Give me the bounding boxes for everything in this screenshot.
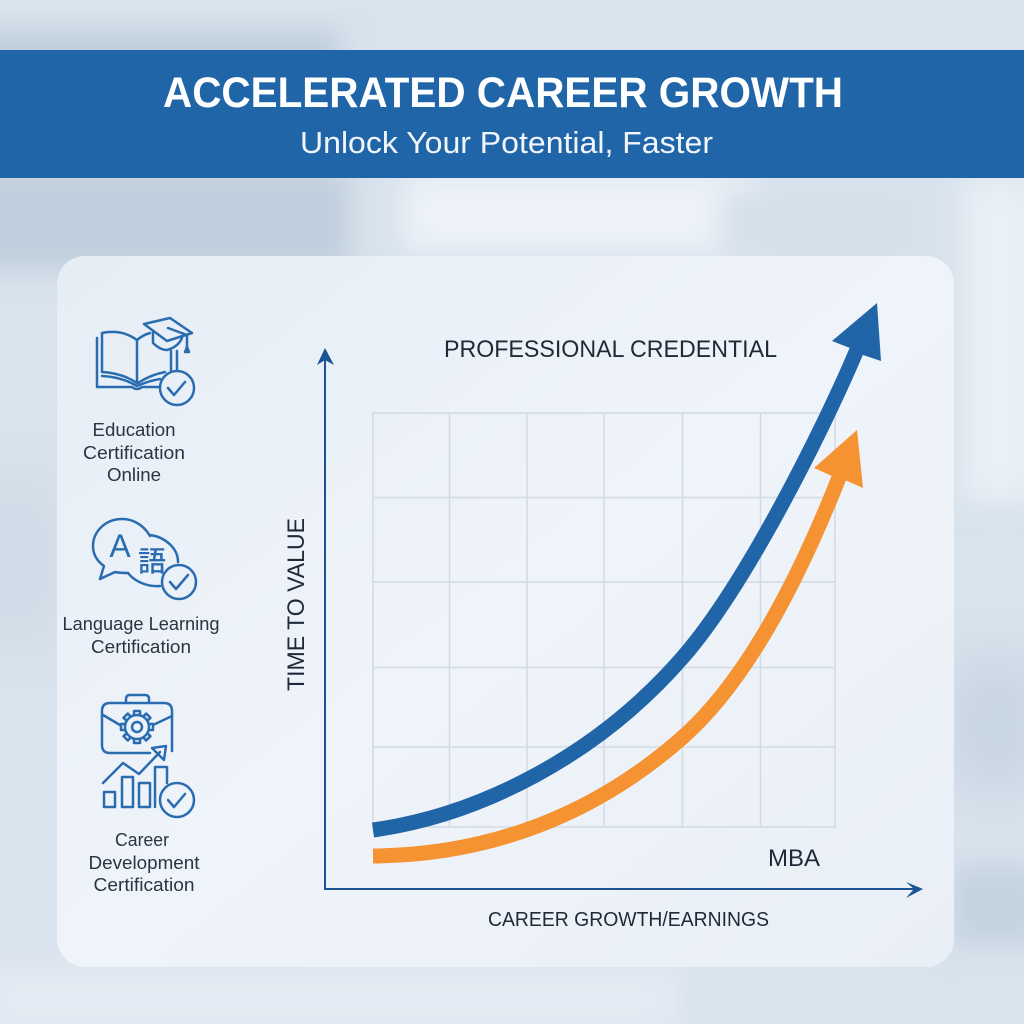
icon letter A: A [109,528,131,564]
y axis [317,348,334,890]
label: Education [92,420,176,440]
label: Certification [83,443,185,463]
subtitle: Unlock Your Potential, Faster [300,125,713,160]
label [83,420,185,485]
label: Certification [94,875,194,895]
icon: briefcase, gear and chart [102,695,194,817]
orange curve: MBA [373,430,863,856]
certification: education [83,318,194,485]
title: ACCELERATED CAREER GROWTH [163,69,843,117]
y axis label: TIME TO VALUE [283,518,310,691]
label: professional credential: PROFESSIONAL CREDENTIAL [444,336,777,363]
x axis [324,882,923,898]
label: Certification [91,637,191,657]
grid [373,413,835,827]
icon: book with graduation cap [97,318,194,405]
label [62,614,220,657]
certification: career [88,695,200,895]
chart [283,303,923,931]
certification: language [62,519,220,657]
label: Language Learning [62,614,220,634]
title banner [0,50,1024,178]
label: MBA: MBA [768,845,820,872]
main panel [57,256,954,967]
icon character: 語 [138,546,166,577]
label [88,830,200,895]
x axis label: CAREER GROWTH/EARNINGS [488,909,769,931]
label: Online [107,465,161,485]
icon: speech bubbles with check [93,519,196,599]
label: Development [88,853,200,873]
label: Career [115,830,169,850]
blue curve: professional credential [373,303,881,830]
